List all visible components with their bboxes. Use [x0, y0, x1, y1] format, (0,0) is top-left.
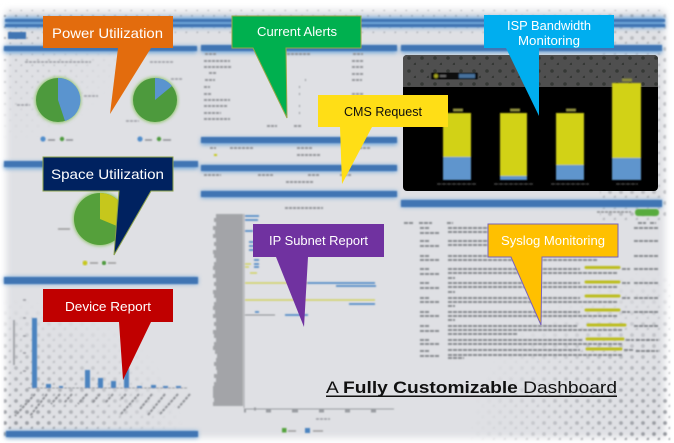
panel: power utilization pies — [17, 62, 183, 142]
callout: ISP Bandwidth Monitoring: Monitoring — [518, 34, 580, 48]
chart legend — [432, 73, 477, 79]
callout: Current Alerts: Current Alerts — [257, 25, 337, 39]
syslog highlights — [586, 268, 625, 349]
callout: ISP Bandwidth Monitoring — [484, 15, 614, 116]
pie: provisioned power — [35, 77, 81, 123]
callout: ISP Bandwidth Monitoring: ISP Bandwidth — [507, 19, 591, 33]
callout: CMS Request: CMS Request — [344, 105, 423, 119]
callout: Syslog Monitoring: Syslog Monitoring — [501, 234, 605, 248]
subnet axis and legend — [244, 409, 394, 433]
callout: Space Utilization — [43, 157, 173, 255]
callout: Space Utilization: Space Utilization — [51, 166, 164, 182]
subnet bars blue — [245, 216, 376, 315]
chart: subnet report — [213, 214, 394, 433]
callout: IP Subnet Report — [253, 224, 384, 327]
table: syslog monitoring — [404, 209, 659, 358]
callout: IP Subnet Report: IP Subnet Report — [269, 234, 369, 248]
callout: Current Alerts — [232, 16, 361, 118]
pie: actual power — [132, 77, 178, 123]
callout: Syslog Monitoring — [488, 224, 618, 325]
bar 3 — [556, 113, 584, 180]
callout: Power Utilization: Power Utilization — [52, 25, 163, 41]
callout: CMS Request — [318, 95, 448, 184]
title: A Fully Customizable Dashboard: A Fully Customizable Dashboard — [326, 378, 617, 397]
syslog rows — [404, 223, 658, 358]
callout: Device Report: Device Report — [65, 299, 151, 314]
table: current alerts — [204, 54, 371, 208]
pie legends — [17, 62, 183, 142]
subnet bars yellow — [245, 264, 375, 300]
chart: ISP bandwidth — [403, 55, 658, 191]
bar chart: device report — [14, 300, 190, 416]
status badge — [597, 209, 659, 216]
callout: Power Utilization — [43, 16, 173, 114]
pie: space utilization — [58, 192, 127, 265]
bar 2 — [500, 113, 527, 180]
bar 4 — [612, 83, 641, 180]
subnet labels column — [213, 216, 243, 404]
bar 1 — [443, 113, 471, 180]
callout: Device Report — [43, 289, 173, 380]
